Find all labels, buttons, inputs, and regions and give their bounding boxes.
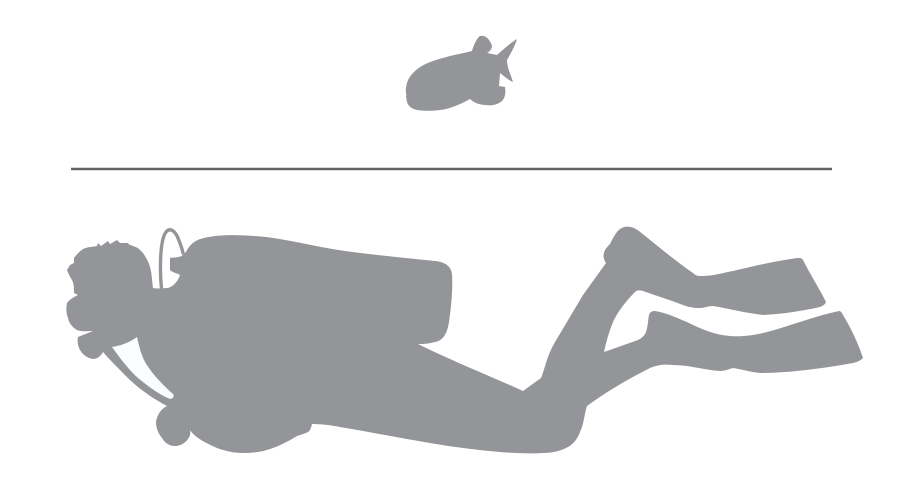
white gap between hose and chest [112, 337, 174, 399]
icon: scuba diver silhouette [66, 227, 863, 453]
divider line [71, 168, 832, 170]
icon: fish silhouette [406, 36, 517, 111]
air hose loop [160, 230, 183, 289]
diver body, tank and fins [66, 227, 863, 453]
